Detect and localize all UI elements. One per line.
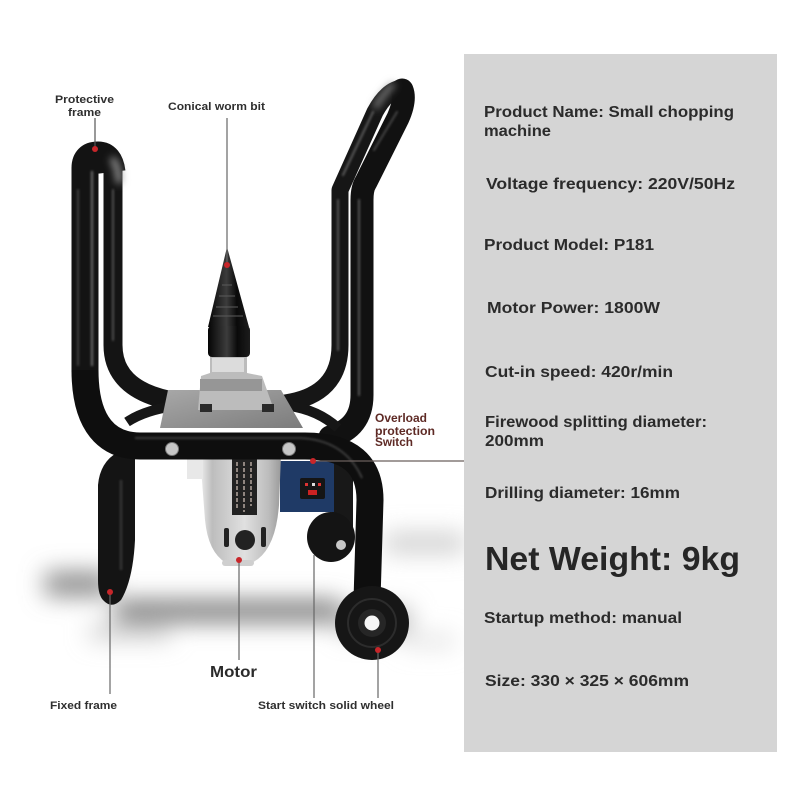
callout: conical worm bit xyxy=(168,101,265,268)
floor shadow xyxy=(45,533,465,647)
callout: conical worm bit: Conical worm bit xyxy=(168,101,265,113)
callout: fixed frame xyxy=(50,589,117,712)
rear tube behind switch box xyxy=(332,462,353,532)
bolts xyxy=(166,442,296,456)
conical worm bit xyxy=(208,247,250,357)
front frame bar xyxy=(85,370,370,600)
spec: firewood splitting diameter: 200mm xyxy=(485,433,544,450)
protective frame: left rear tube xyxy=(113,165,168,400)
callout: protective frame: frame xyxy=(68,107,101,119)
spec: firewood splitting diameter: Firewood splitting diameter: xyxy=(485,414,707,431)
spec: size: Size: 330 × 325 × 606mm xyxy=(485,673,689,690)
callout: overload protection switch xyxy=(310,413,464,464)
callout: fixed frame: Fixed frame xyxy=(50,700,117,712)
solid wheel xyxy=(335,586,409,660)
fixed frame leg xyxy=(98,452,135,605)
switch panel xyxy=(300,478,325,499)
protective frame: top highlight xyxy=(112,158,119,183)
callout: motor: Motor xyxy=(210,664,257,681)
label: protective frame: Protective xyxy=(55,94,114,106)
callout: overload protection switch: protection xyxy=(375,426,435,438)
spec: startup method: Startup method: manual xyxy=(484,610,682,627)
spec: product model: Product Model: P181 xyxy=(484,237,654,254)
spec: product name: Product Name: Small chopping xyxy=(484,104,734,121)
callout: motor xyxy=(210,557,257,681)
lower ring tube xyxy=(127,406,338,428)
spec: cut-in speed: Cut-in speed: 420r/min xyxy=(485,364,673,381)
motor body xyxy=(200,455,281,563)
callout: overload protection switch: Switch xyxy=(375,437,413,449)
spec: voltage frequency: Voltage frequency: 220V/50Hz xyxy=(486,176,735,193)
spec: net weight: Net Weight: 9kg xyxy=(485,540,740,577)
motor cap and vents xyxy=(222,527,266,566)
callout: protective frame xyxy=(55,94,114,152)
motor label xyxy=(232,458,257,515)
callout: overload protection switch: Overload xyxy=(375,413,427,425)
callout: start switch solid wheel: Start switch solid wheel xyxy=(258,700,394,712)
spec: product name xyxy=(484,104,734,140)
spec: firewood splitting diameter xyxy=(485,414,707,450)
panel: specifications background xyxy=(464,54,777,752)
protective frame: right rear tube xyxy=(285,88,404,403)
spec: drilling diameter: Drilling diameter: 16mm xyxy=(485,485,680,502)
blue switch box xyxy=(280,461,334,512)
protective frame: right front tube xyxy=(330,90,403,437)
rear small wheel xyxy=(307,512,355,562)
machine illustration xyxy=(78,84,409,660)
mounting plate xyxy=(160,390,303,428)
protective frame: left front tube xyxy=(85,155,112,372)
motor neck xyxy=(198,356,274,410)
callout: start switch solid wheel xyxy=(258,555,394,712)
spec: product name: machine xyxy=(484,123,551,140)
spec: motor power: Motor Power: 1800W xyxy=(487,300,661,317)
tube grey reflection xyxy=(375,84,394,108)
tube highlights xyxy=(78,112,397,395)
